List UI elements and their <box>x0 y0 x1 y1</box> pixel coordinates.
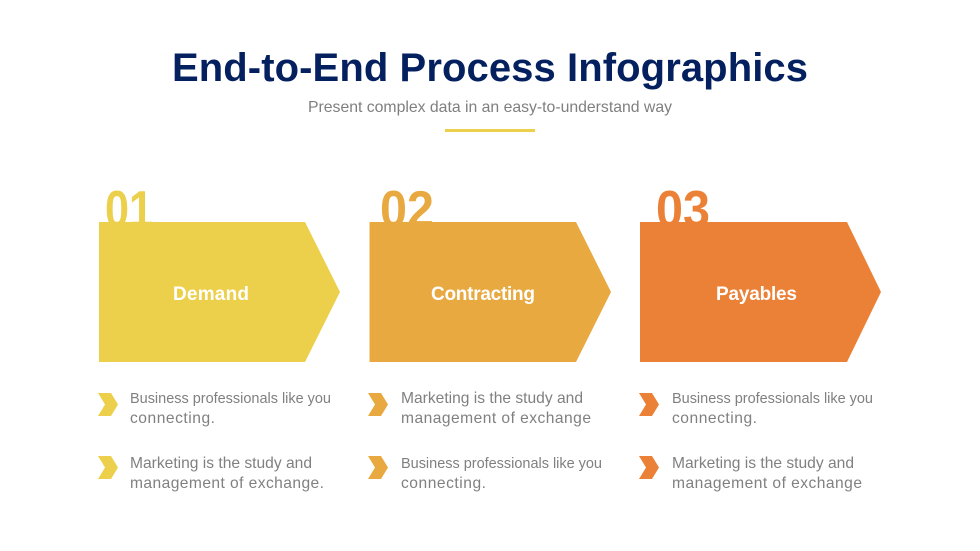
text block: payables item 2: management of exchange <box>672 475 862 492</box>
panel: step 1 demand <box>98 181 340 492</box>
text block: demand item 2 <box>130 455 324 492</box>
text block: payables item 1: Business professionals like you <box>672 391 873 407</box>
text block: contracting item 1: Marketing is the study and <box>401 390 583 407</box>
icon: chevron bullet 1 <box>98 393 118 416</box>
icon: chevron bullet 1 <box>639 393 659 416</box>
icon: chevron bullet 1 <box>368 393 388 416</box>
heading: demand: Demand <box>173 284 249 305</box>
text block: contracting item 1 <box>401 390 591 427</box>
text block: contracting item 2: connecting. <box>401 475 486 492</box>
number 02: 02 <box>380 181 434 239</box>
heading: payables: Payables <box>716 284 797 305</box>
text block: demand item 1 <box>130 391 331 427</box>
title: End-to-End Process Infographics <box>172 46 808 90</box>
heading: contracting: Contracting <box>431 284 535 305</box>
arrow: payables <box>640 222 881 362</box>
text block: payables item 1: connecting. <box>672 410 757 427</box>
title underline <box>445 129 535 132</box>
text block: demand item 1: Business professionals like you <box>130 391 331 407</box>
text block: contracting item 2 <box>401 456 602 492</box>
arrow: demand <box>99 222 340 362</box>
text block: demand item 1: connecting. <box>130 410 215 427</box>
arrow: contracting <box>370 222 611 362</box>
number 01: 01 <box>105 181 153 239</box>
panel: step 2 contracting <box>368 181 611 492</box>
panel: step 3 payables <box>639 181 881 492</box>
icon: chevron bullet 2 <box>639 456 659 479</box>
number 03: 03 <box>656 181 710 239</box>
subtitle: Present complex data in an easy-to-understand way <box>308 99 672 116</box>
text block: contracting item 1: management of exchange <box>401 410 591 427</box>
icon: chevron bullet 2 <box>368 456 388 479</box>
text block: contracting item 2: Business professionals like you <box>401 456 602 472</box>
text block: payables item 1 <box>672 391 873 427</box>
text block: demand item 2: Marketing is the study and <box>130 455 312 472</box>
text block: payables item 2: Marketing is the study and <box>672 455 854 472</box>
icon: chevron bullet 2 <box>98 456 118 479</box>
text block: payables item 2 <box>672 455 862 492</box>
text block: demand item 2: management of exchange. <box>130 475 324 492</box>
